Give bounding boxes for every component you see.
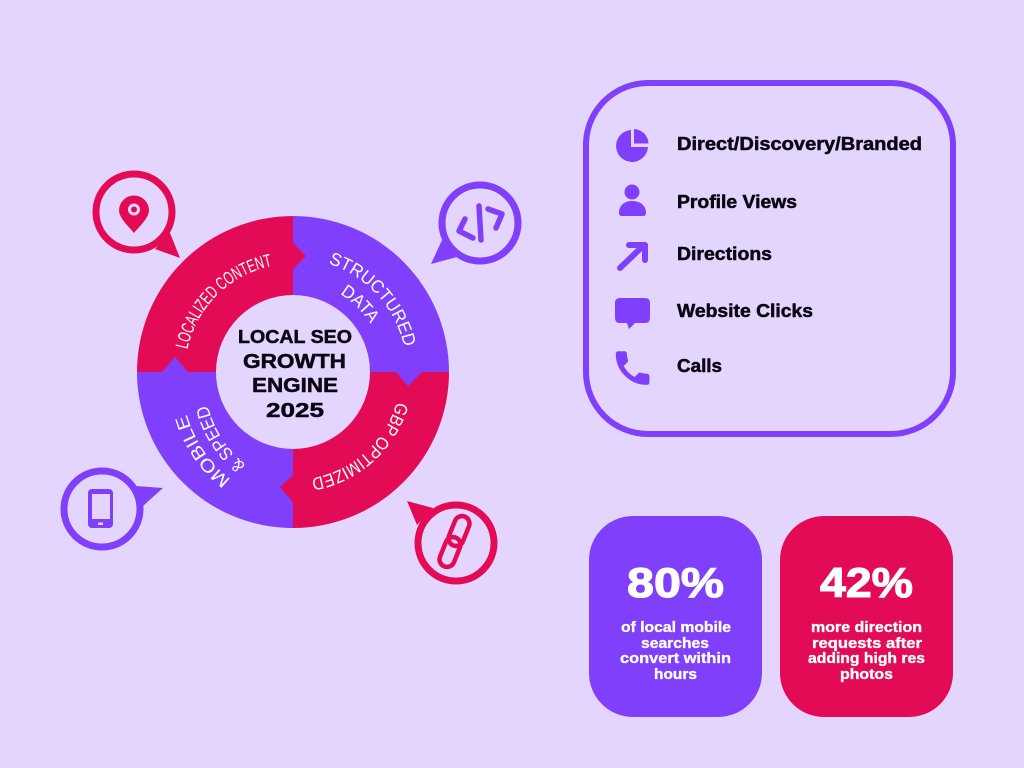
arrow notch: bottom bbox=[280, 475, 293, 502]
stat description: convert within bbox=[620, 651, 731, 667]
arrow notch: left bbox=[161, 357, 189, 373]
heading: center title: 2025 bbox=[266, 400, 324, 422]
stat description: adding high res bbox=[808, 651, 925, 667]
legend label: website clicks: Website Clicks bbox=[677, 301, 813, 321]
stat description bbox=[620, 620, 731, 683]
label: data: DATA bbox=[341, 284, 378, 324]
legend label: directions: Directions bbox=[677, 244, 772, 264]
stat description bbox=[808, 620, 925, 683]
icon: speech bubble bbox=[615, 298, 650, 329]
stat description: of local mobile bbox=[621, 620, 731, 636]
ring segment: localized content bbox=[137, 216, 293, 372]
stat description: searches bbox=[641, 636, 709, 652]
label: mobile: MOBILE bbox=[175, 415, 230, 488]
stat description: more direction bbox=[811, 620, 922, 636]
label: structured: STRUCTURED bbox=[330, 253, 415, 345]
stat description: hours bbox=[654, 667, 697, 683]
icon: chain link bubble bbox=[407, 501, 494, 581]
legend label: calls: Calls bbox=[677, 356, 722, 376]
arrow notch: top bbox=[292, 242, 306, 270]
legend label: direct discovery branded: Direct/Discovery/Branded bbox=[677, 134, 922, 154]
icon: person bbox=[619, 184, 646, 216]
panel: 42 percent stat bbox=[780, 516, 953, 717]
icon: phone handset bbox=[616, 352, 649, 384]
heading: center title bbox=[238, 327, 352, 422]
stat number: 80%: 80% bbox=[627, 559, 724, 606]
ring segment: structured data bbox=[293, 216, 449, 372]
arrow notch: right bbox=[395, 371, 423, 386]
legend label: profile views: Profile Views bbox=[677, 192, 797, 212]
ring segment: mobile and speed bbox=[137, 372, 293, 528]
heading: center title: ENGINE bbox=[252, 375, 338, 397]
label: GBP optimized: GBP OPTIMIZED bbox=[313, 404, 408, 490]
label: localized content: LOCALIZED CONTENT bbox=[176, 254, 270, 348]
icon: arrow bbox=[620, 245, 645, 268]
panel: 80 percent stat bbox=[589, 516, 762, 717]
stat description: requests after bbox=[812, 636, 922, 652]
stat description: photos bbox=[840, 667, 893, 683]
stat number: 42%: 42% bbox=[820, 559, 913, 606]
panel: growth engine ring bbox=[137, 216, 449, 528]
heading: center title: LOCAL SEO bbox=[238, 327, 352, 347]
heading: center title: GROWTH bbox=[243, 351, 346, 373]
icon: pie chart bbox=[616, 129, 648, 162]
icon: code bubble bbox=[431, 185, 518, 264]
icon: mobile phone bubble bbox=[64, 471, 163, 547]
panel: metrics legend bbox=[586, 83, 953, 434]
ring segment: GBP optimized bbox=[293, 372, 449, 528]
label: and speed: & SPEED bbox=[197, 407, 244, 472]
icon: location pin bubble bbox=[96, 174, 180, 258]
